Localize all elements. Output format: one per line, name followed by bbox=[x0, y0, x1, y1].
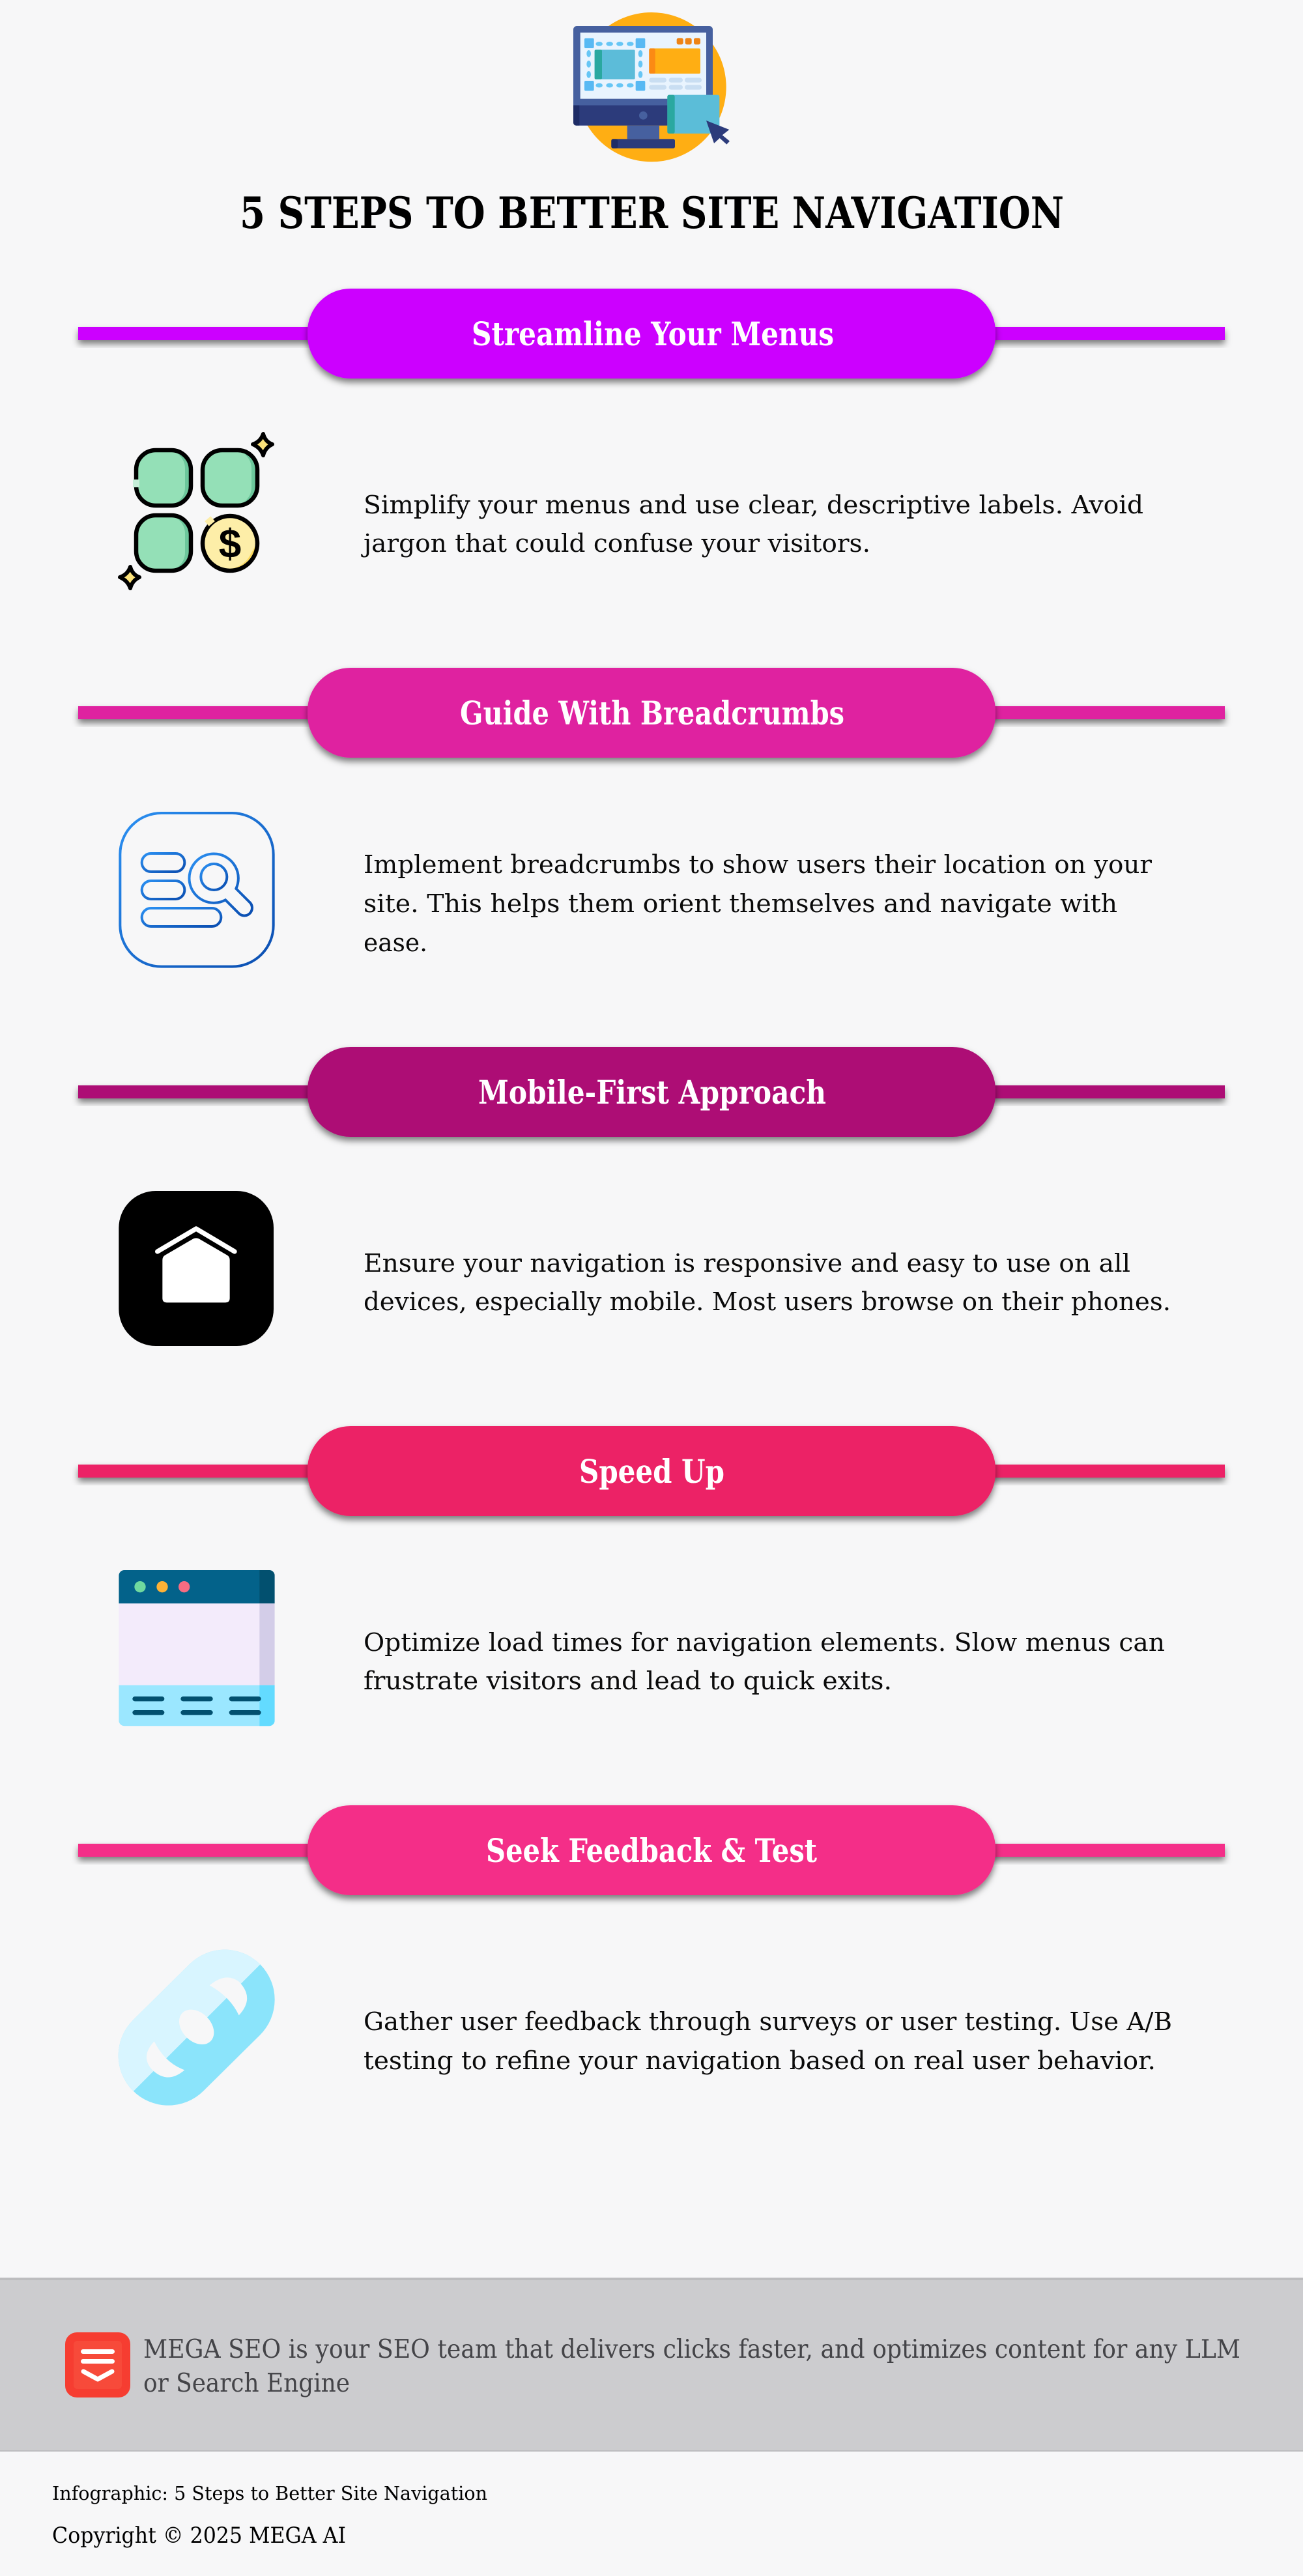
header bar: seek feedback and test: Seek Feedback & Test bbox=[486, 1831, 817, 1870]
text: step 2 description: ease. bbox=[364, 928, 427, 957]
icon: home app bbox=[119, 1191, 274, 1346]
text: step 2 description: site. This helps them orient themselves and navigate with bbox=[364, 889, 1117, 918]
panel: mega seo banner bbox=[0, 2278, 1303, 2452]
text: step 4 description: frustrate visitors and lead to quick exits. bbox=[364, 1667, 892, 1695]
header bar: seek feedback and test bbox=[78, 1805, 1225, 1895]
panel: step 3 mobile-first approach bbox=[78, 1047, 1225, 1346]
text: mega seo description: or Search Engine bbox=[143, 2369, 350, 2398]
text: step 2 description bbox=[364, 850, 1153, 957]
text: step 3 description bbox=[364, 1249, 1171, 1316]
text: mega seo description bbox=[143, 2335, 1240, 2398]
text: step 5 description: testing to refine your navigation based on real user behavior. bbox=[364, 2046, 1156, 2075]
icon: app grid with coin bbox=[120, 434, 272, 588]
header bar: speed up: Speed Up bbox=[579, 1452, 724, 1491]
header bar: streamline your menus: Streamline Your Menus bbox=[472, 315, 834, 353]
text: step 1 description: Simplify your menus and use clear, descriptive labels. Avoid bbox=[364, 491, 1143, 519]
text: step 2 description: Implement breadcrumbs to show users their location on your bbox=[364, 850, 1153, 879]
title: 5 STEPS TO BETTER SITE NAVIGATION bbox=[240, 188, 1064, 238]
panel: step 5 seek feedback and test bbox=[78, 1805, 1225, 2078]
icon: mega seo logo bbox=[65, 2332, 130, 2397]
text: step 4 description bbox=[364, 1628, 1165, 1695]
panel: step 1 streamline your menus bbox=[78, 289, 1225, 588]
header bar: mobile-first approach bbox=[78, 1047, 1225, 1137]
header bar: mobile-first approach: Mobile-First Approach bbox=[478, 1073, 826, 1111]
icon: chain link bbox=[147, 1977, 247, 2078]
icon: monitor with cursor bbox=[573, 12, 730, 162]
header bar: guide with breadcrumbs: Guide With Breadcrumbs bbox=[460, 694, 844, 732]
text: step 4 description: Optimize load times for navigation elements. Slow menus can bbox=[364, 1628, 1165, 1657]
panel: step 4 speed up bbox=[78, 1426, 1225, 1726]
icon: app grid with coin: $ bbox=[219, 522, 241, 567]
header bar: guide with breadcrumbs bbox=[78, 668, 1225, 758]
text: step 1 description bbox=[361, 491, 1143, 558]
text: infographic caption: Infographic: 5 Steps to Better Site Navigation bbox=[52, 2482, 487, 2504]
header bar: streamline your menus bbox=[78, 289, 1225, 379]
icon: list and magnifier bbox=[120, 813, 274, 967]
text: copyright: Copyright © 2025 MEGA AI bbox=[52, 2523, 346, 2549]
icon: browser window bbox=[119, 1570, 275, 1726]
text: step 3 description: devices, especially mobile. Most users browse on their phones. bbox=[364, 1287, 1171, 1316]
text: step 5 description bbox=[364, 2007, 1172, 2075]
text: step 3 description: Ensure your navigation is responsive and easy to use on all bbox=[364, 1249, 1130, 1278]
panel: step 2 guide with breadcrumbs bbox=[78, 668, 1225, 967]
header bar: speed up bbox=[78, 1426, 1225, 1516]
text: step 5 description: Gather user feedback through surveys or user testing. Use A/B bbox=[364, 2007, 1172, 2036]
text: mega seo description: MEGA SEO is your SEO team that delivers clicks faster, and optimizes content for any LLM bbox=[143, 2335, 1240, 2364]
text: step 1 description: jargon that could confuse your visitors. bbox=[361, 529, 870, 558]
